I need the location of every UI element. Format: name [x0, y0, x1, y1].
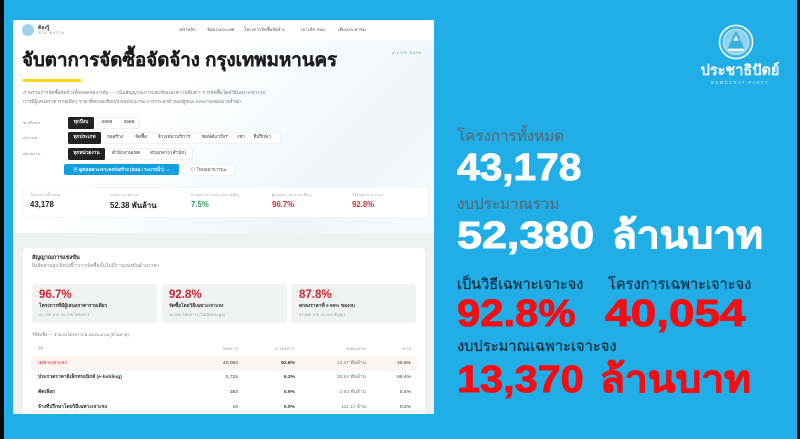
row: specific method: เฉพาะเจาะจง: [38, 361, 67, 366]
number: total budget: [457, 215, 763, 257]
filter: type: จ้างเหมาบริการ: [158, 135, 190, 140]
row: e-bidding: 35.84 พันล้าน: [337, 375, 366, 380]
filter: year: 2568: [124, 120, 134, 125]
yellow underline: [23, 79, 81, 82]
row: e-bidding: ประกวดราคาอิเล็กทรอนิกส์ (e-bidding): [38, 375, 122, 380]
label: specific method share: เป็นวิธีเฉพาะเจาะจง: [457, 277, 583, 293]
tile: price near budget: [291, 284, 416, 323]
page title: จับตาการจัดซื้อจัดจ้าง กรุงเทพมหานคร: [22, 49, 337, 70]
party name: ประชาธิปัตย์: [701, 63, 779, 79]
stat: specific method: [352, 192, 383, 209]
intro text: การมีผู้เสนอราคารายเดียว ราคาที่ตกลงเทียบกับงบประมาณ การกระจุกตัวของผู้ชนะ และงานของบางสำนัก: [23, 100, 241, 105]
label: total budget: งบประมาณรวม: [457, 196, 559, 213]
stat: total projects: โครงการทั้งหมด: [30, 193, 61, 197]
row: specific method: 25.5%: [397, 361, 411, 366]
navigation: จัดตรงประเทศ: [207, 27, 234, 32]
blue button: ▣ ดูงบเฉพาะเจาะจงก่อสร้าง (ถนน / ระบายน้ำ) →: [73, 167, 170, 172]
number: specific method share: 92.8%: [457, 293, 576, 335]
live data badge: ● LIVE DATA: [392, 51, 422, 55]
tile: single bidder: [32, 284, 157, 323]
stats row: [23, 187, 429, 218]
tile: specific method: 92.8%: [169, 289, 202, 301]
stat: savings: [191, 193, 239, 209]
row: selection: 5.4%: [400, 390, 411, 395]
row: consultant: จ้างที่ปรึกษาโดยวิธีเฉพาะเจาะจง: [38, 405, 107, 410]
filter: type: ประเภท: [23, 136, 37, 140]
filter: year: 2569: [102, 120, 112, 125]
number: specific method budget: [457, 359, 751, 401]
row: consultant: 10: [233, 405, 238, 410]
site logo: ต้องรู้: [38, 25, 49, 31]
site logo: [22, 24, 64, 36]
filter: type: [23, 132, 281, 144]
label: specific method budget: งบประมาณเฉพาะเจาะจง: [457, 339, 617, 355]
table header: งบประมาณ: [346, 346, 366, 351]
filter: year: ช่วงปีงบฯ: [23, 121, 40, 125]
row: consultant: 0.2%: [400, 405, 411, 410]
label: specific method projects: โครงการเฉพาะเจาะจง: [608, 277, 751, 293]
filter: type: เช่า: [237, 135, 245, 140]
stat: single bidder: ผู้เสนอราคารายเดียว: [272, 193, 311, 197]
icon: party emblem: [718, 24, 754, 60]
section heading: สัญญาณการแข่งขัน: [32, 255, 80, 261]
intro text: ภาพรวมการจัดซื้อจัดจ้างทั้งหมดของ กทม. — เน้นสัญญาณการแข่งขันและความคุ้มค่า: การจัดซื้อโดยวิธีเฉพาะเจาะจง: [23, 91, 265, 96]
stat: specific method: 92.8%: [352, 200, 374, 209]
logo: Democrat Party: [701, 24, 780, 85]
tile: price near budget: 87.8%: [299, 289, 332, 301]
filter: type: ซอฟต์แวร์/IT: [202, 135, 228, 140]
panel: competition signals: [23, 248, 425, 414]
panel: website screenshot: [13, 20, 434, 414]
stat: total projects: [30, 192, 61, 209]
number: specific method projects: 40,054: [605, 293, 746, 335]
stat: total projects: 43,178: [30, 200, 54, 209]
site logo: GOV WATCH: [38, 31, 64, 35]
tile: single bidder: 41,759 จาก 43,178 โครงการ: [39, 312, 90, 317]
stat: single bidder: [272, 192, 311, 209]
tile: single bidder: 96.7%: [39, 289, 72, 301]
row: e-bidding: 68.4%: [397, 375, 411, 380]
tile: single bidder: โครงการที่มีผู้เสนอราคารายเดียว: [39, 304, 107, 309]
stat: specific method: วิธีเฉพาะเจาะจง: [352, 193, 383, 197]
filter: type: ก่อสร้าง: [107, 135, 123, 140]
gray section background: [13, 233, 434, 414]
row: selection: 383: [230, 390, 238, 395]
row: specific method: 40,054: [223, 361, 238, 366]
row: selection: 2.83 พันล้าน: [339, 390, 366, 395]
table header: โครงการ: [222, 346, 238, 351]
number: total budget: ล้านบาท: [612, 215, 763, 257]
stat: savings: 7.5%: [191, 200, 209, 209]
row: specific method: 92.8%: [281, 361, 295, 366]
intro text: [23, 88, 265, 105]
filter: department: [23, 148, 193, 160]
navigation: โครงการจัดซื้อจัดจ้าง: [244, 27, 285, 32]
stat: savings: ส่วนต่างจากงบ (ประหยัด): [191, 193, 239, 197]
number: specific method budget: 13,370: [457, 359, 584, 401]
section subtitle: ยิ่งสัดส่วนสูง ยิ่งบ่งชี้ว่าการจัดซื้อนั้นไม่มีการแข่งขันด้านราคา: [32, 264, 160, 269]
filter: type: จัดซื้อ: [135, 135, 147, 140]
right black edge: [797, 0, 800, 439]
navigation: เสียงประชาชน: [338, 27, 366, 32]
table caption: วิธีจัดซื้อ — จำนวนโครงการ & งบประมาณ (ล้านบาท): [32, 332, 129, 337]
row: specific method: [31, 356, 417, 371]
filter: type: ทุกประเภท: [73, 135, 96, 140]
tile: specific method: จัดซื้อโดยวิธีเฉพาะเจาะจง: [169, 304, 223, 309]
filter: department: สำนักงานเขต: [112, 151, 140, 156]
open data button: ◎ โหมดสาธารณะ: [191, 167, 227, 172]
table: procurement methods: [31, 346, 417, 410]
number: total budget: 52,380: [457, 215, 594, 257]
row: e-bidding: [38, 373, 411, 380]
stat: total budget: 52.38 พันล้าน: [110, 201, 157, 210]
open data button: [183, 164, 235, 176]
stat: single bidder: 96.7%: [272, 200, 294, 209]
table header: [38, 346, 411, 351]
stat: total budget: งบประมาณรวม: [110, 193, 139, 197]
party name english: DEMOCRAT PARTY: [711, 80, 769, 85]
filter: year: ทุกปีงบ: [74, 120, 88, 125]
row: consultant: 111.17 ล้าน: [341, 405, 366, 410]
row: consultant: 0.0%: [284, 405, 295, 410]
table header: % งบ: [402, 346, 411, 351]
table header: วิธี: [38, 346, 43, 351]
label: total projects: โครงการทั้งหมด: [457, 128, 564, 145]
blue button: [64, 164, 179, 175]
filter: department: ทุกหน่วยงาน: [73, 151, 100, 156]
filter: year: [23, 117, 140, 129]
hero background: [13, 40, 434, 233]
row: specific method: 13.37 พันล้าน: [337, 361, 366, 366]
tile: price near budget: 37,885 จาก 43,161 สัญญา: [299, 312, 345, 317]
filter: department: ส่วนกลาง (สำนัก): [150, 151, 186, 156]
row: e-bidding: 2,715: [226, 375, 238, 380]
navigation: เจาะลึก กทม.: [301, 27, 326, 32]
tile: specific method: 40,054 โครงการ (ไม่เปิดประมูล): [169, 312, 225, 317]
navigation: หน้าหลัก: [179, 27, 196, 32]
tile: price near budget: ตกลงราคาที่ ≥ 99% ของงบ: [299, 304, 355, 309]
navigation: [179, 26, 366, 32]
row: selection: คัดเลือก: [38, 390, 55, 395]
table header: % โครงการ: [275, 346, 295, 351]
row: e-bidding: 6.3%: [284, 375, 295, 380]
number: specific method budget: ล้านบาท: [600, 359, 751, 401]
left black edge: [0, 0, 4, 439]
row: selection: 0.9%: [284, 390, 295, 395]
row: selection: [38, 388, 411, 395]
stat: total budget: [110, 193, 157, 210]
filter: type: ที่ปรึกษา: [253, 135, 271, 140]
filter: department: หน่วยงาน: [23, 152, 41, 156]
number: total projects: 43,178: [457, 147, 581, 189]
row: consultant: [38, 402, 411, 410]
tile: specific method: [162, 284, 287, 323]
